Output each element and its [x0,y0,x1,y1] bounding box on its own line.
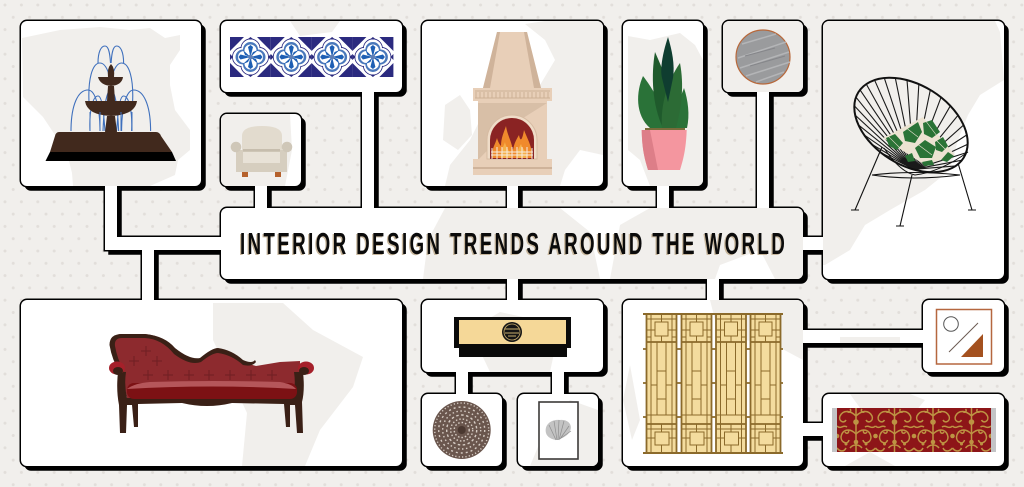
icon: fountain [46,46,176,161]
panel: patterned rug [823,394,1004,466]
panel: armchair [221,114,301,186]
panel: title [221,208,803,279]
panel: tile strip [221,21,402,92]
panel: framed shell [518,394,598,466]
panel: sofa [21,300,402,466]
panel: potted plant [623,21,703,186]
panel: fountain [21,21,201,186]
panel: mirror [723,21,803,92]
panel: acapulco chair [823,21,1004,279]
panel: round rug [422,394,502,466]
panel: folding screen [623,300,803,466]
icon: round mirror [736,30,790,84]
panel: fireplace [422,21,603,186]
icon: console table [454,317,571,357]
icon: potted plant [638,37,688,170]
icon: framed shell [539,402,578,459]
icon: monstera pillow [883,117,955,166]
icon: fireplace [473,32,552,175]
icon: lounge chair [837,58,985,226]
icon: chaise sofa [109,334,314,433]
title shadow: INTERIOR DESIGN TRENDS AROUND THE WORLD [239,228,783,262]
icon: folding screen [643,313,783,454]
icon: armchair [231,126,292,177]
icon: blue tiles [230,37,393,77]
panel: abstract art [923,300,1004,372]
icon: round carved rug [433,401,491,459]
icon: red damask rug [832,408,996,452]
title: INTERIOR DESIGN TRENDS AROUND THE WORLD [240,227,785,261]
icon: framed abstract art [936,310,992,364]
panel: console table [422,300,603,372]
